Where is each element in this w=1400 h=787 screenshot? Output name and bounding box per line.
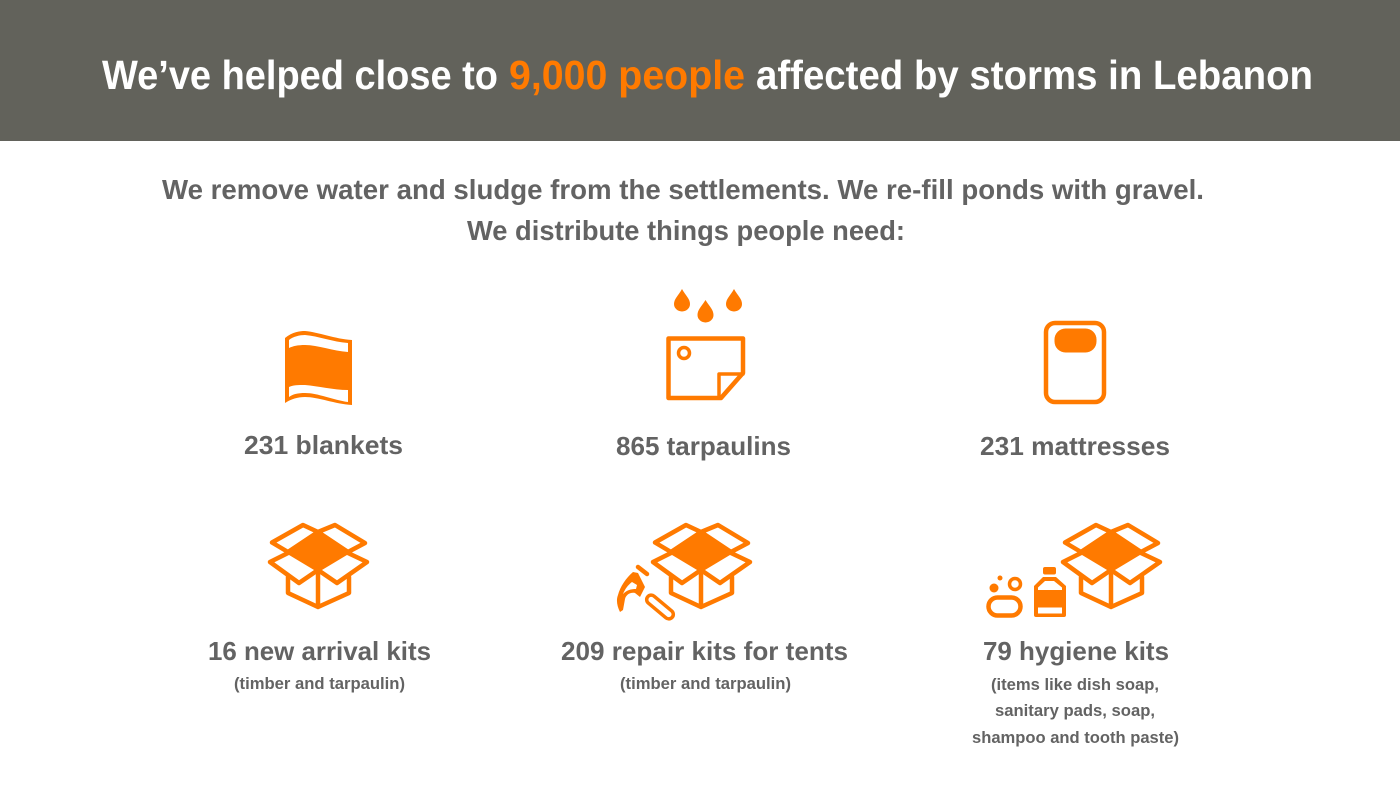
icon: box and hammer xyxy=(617,525,750,621)
icon: soap, bottle and box xyxy=(988,525,1160,617)
intro text: We remove water and sludge from the settlements. We re-fill ponds with gravel. xyxy=(162,174,1204,205)
title: affected by storms in Lebanon xyxy=(756,52,1313,98)
note: sanitary pads, soap, xyxy=(995,701,1155,720)
item: hygiene kits xyxy=(972,525,1179,747)
label: 209 repair kits for tents xyxy=(561,636,848,666)
title banner xyxy=(0,0,1400,141)
item: tarpaulins xyxy=(616,289,791,461)
label: 79 hygiene kits xyxy=(983,636,1169,666)
item: mattresses xyxy=(980,323,1170,461)
item: repair kits xyxy=(561,525,848,693)
intro text xyxy=(162,174,1204,246)
title xyxy=(102,52,1313,98)
note: shampoo and tooth paste) xyxy=(972,728,1179,747)
icon: tarpaulin with rain drops xyxy=(668,289,743,398)
note xyxy=(972,675,1179,747)
label: 231 blankets xyxy=(244,430,403,460)
label: 231 mattresses xyxy=(980,431,1170,461)
title: We’ve helped close to xyxy=(102,52,498,98)
item: blankets xyxy=(244,331,403,460)
note: (timber and tarpaulin) xyxy=(234,674,405,693)
note: (items like dish soap, xyxy=(991,675,1159,694)
label: 865 tarpaulins xyxy=(616,431,791,461)
icon: open box xyxy=(270,525,367,607)
title: 9,000 people xyxy=(509,52,745,98)
icon: mattress xyxy=(1046,323,1104,402)
item: new arrival kits xyxy=(208,525,431,693)
note: (timber and tarpaulin) xyxy=(620,674,791,693)
label: 16 new arrival kits xyxy=(208,636,431,666)
icon: blanket xyxy=(285,331,352,405)
intro text: We distribute things people need: xyxy=(467,215,905,246)
